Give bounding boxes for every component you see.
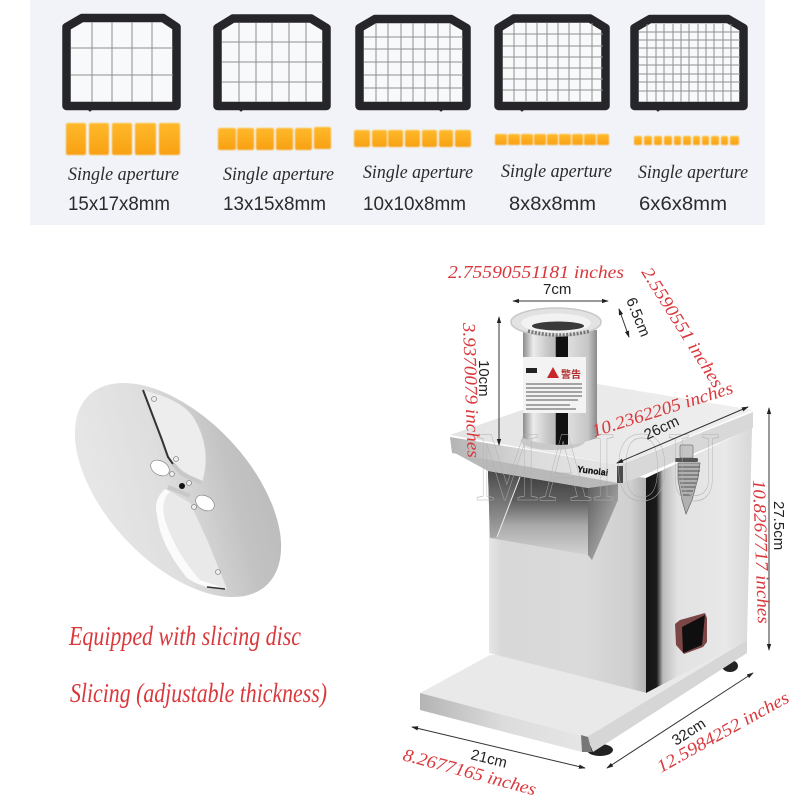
upper blade <box>143 390 206 483</box>
dimension: tube height 10cm <box>459 317 499 458</box>
slicing disc caption: Slicing (adjustable thickness) <box>70 678 327 708</box>
option 2: 13x15x8mm <box>218 18 334 215</box>
dimension: tube width 7cm: 7cm <box>543 281 571 298</box>
dimension: base depth 32cm <box>607 673 792 776</box>
label 5: Single aperture <box>638 162 748 183</box>
feed tube cylinder <box>511 308 601 450</box>
dimension: top width 26cm: 26cm <box>642 413 682 444</box>
dimension: base width 21cm <box>401 727 585 799</box>
grid frame 2 <box>218 18 326 112</box>
dimension: base depth 32cm: 32cm <box>669 715 709 749</box>
band above chute <box>453 452 618 488</box>
option 1: 15x17x8mm <box>66 18 180 215</box>
brand label: Yunolai <box>577 464 609 478</box>
orange cubes 2 <box>218 127 331 150</box>
orange cubes 1 <box>66 123 180 155</box>
body right face <box>646 428 752 693</box>
discharge chute <box>488 471 618 560</box>
dimension: height 27.5cm <box>749 408 787 650</box>
dimension: base width 21cm: 21cm <box>469 746 509 772</box>
size 3: 10x10x8mm <box>363 193 466 215</box>
warning label: 警告 <box>561 368 581 381</box>
dimension: tube width 7cm: 2.75590551181 inches <box>448 262 624 282</box>
machine illustration <box>420 308 753 756</box>
grid frame 1 <box>66 18 176 112</box>
dimension: base width 21cm: 8.2677165 inches <box>401 745 538 799</box>
size 1: 15x17x8mm <box>68 193 170 215</box>
size 5: 6x6x8mm <box>639 193 727 215</box>
lower blade <box>156 489 227 589</box>
dimension: top width 26cm <box>589 378 748 463</box>
machine feet <box>587 660 738 756</box>
warning label <box>523 357 586 413</box>
power switch <box>675 613 707 654</box>
option 3: 10x10x8mm <box>354 19 473 215</box>
size 4: 8x8x8mm <box>509 193 596 215</box>
orange cubes 3 <box>354 130 471 147</box>
disc holes <box>148 457 217 514</box>
label 1: Single aperture <box>68 164 179 185</box>
dimension: tube width 7cm <box>448 262 624 301</box>
blade edges <box>143 390 173 464</box>
grid frame 3 <box>360 19 466 112</box>
disc hub and screws <box>152 396 220 574</box>
panel: cutting grid options <box>30 0 765 225</box>
orange cubes 5 <box>634 136 739 145</box>
feed tube ring <box>511 308 601 336</box>
dimension: tube height 10cm: 3.9370079 inches <box>459 321 484 458</box>
dimension: height 27.5cm: 27.5cm <box>770 501 787 550</box>
dimension: height 27.5cm: 10.8267717 inches <box>749 479 774 624</box>
grid frame 5 <box>634 19 744 112</box>
slicing disc caption <box>68 621 327 708</box>
grid frame 4 <box>498 18 606 112</box>
orange cubes 4 <box>495 134 609 145</box>
dimension: tube depth 6.5cm: 2.5590551 inches <box>638 264 728 391</box>
option 4: 8x8x8mm <box>495 18 612 215</box>
label 4: Single aperture <box>501 161 612 182</box>
option 5: 6x6x8mm <box>634 19 748 215</box>
slicing disc illustration <box>37 346 319 634</box>
dimension: top width 26cm: 10.2362205 inches <box>589 378 735 441</box>
slicing disc caption: Equipped with slicing disc <box>68 621 301 651</box>
dimension: tube depth 6.5cm: 6.5cm <box>622 295 653 339</box>
dimension: base depth 32cm: 12.5984252 inches <box>653 687 792 776</box>
label 3: Single aperture <box>363 162 473 183</box>
top plate <box>450 384 753 483</box>
side latch <box>675 445 700 514</box>
base plate <box>420 640 747 752</box>
label 2: Single aperture <box>223 164 334 185</box>
dimension: tube height 10cm: 10cm <box>475 360 492 397</box>
body front face <box>489 460 647 693</box>
size 2: 13x15x8mm <box>223 193 326 215</box>
